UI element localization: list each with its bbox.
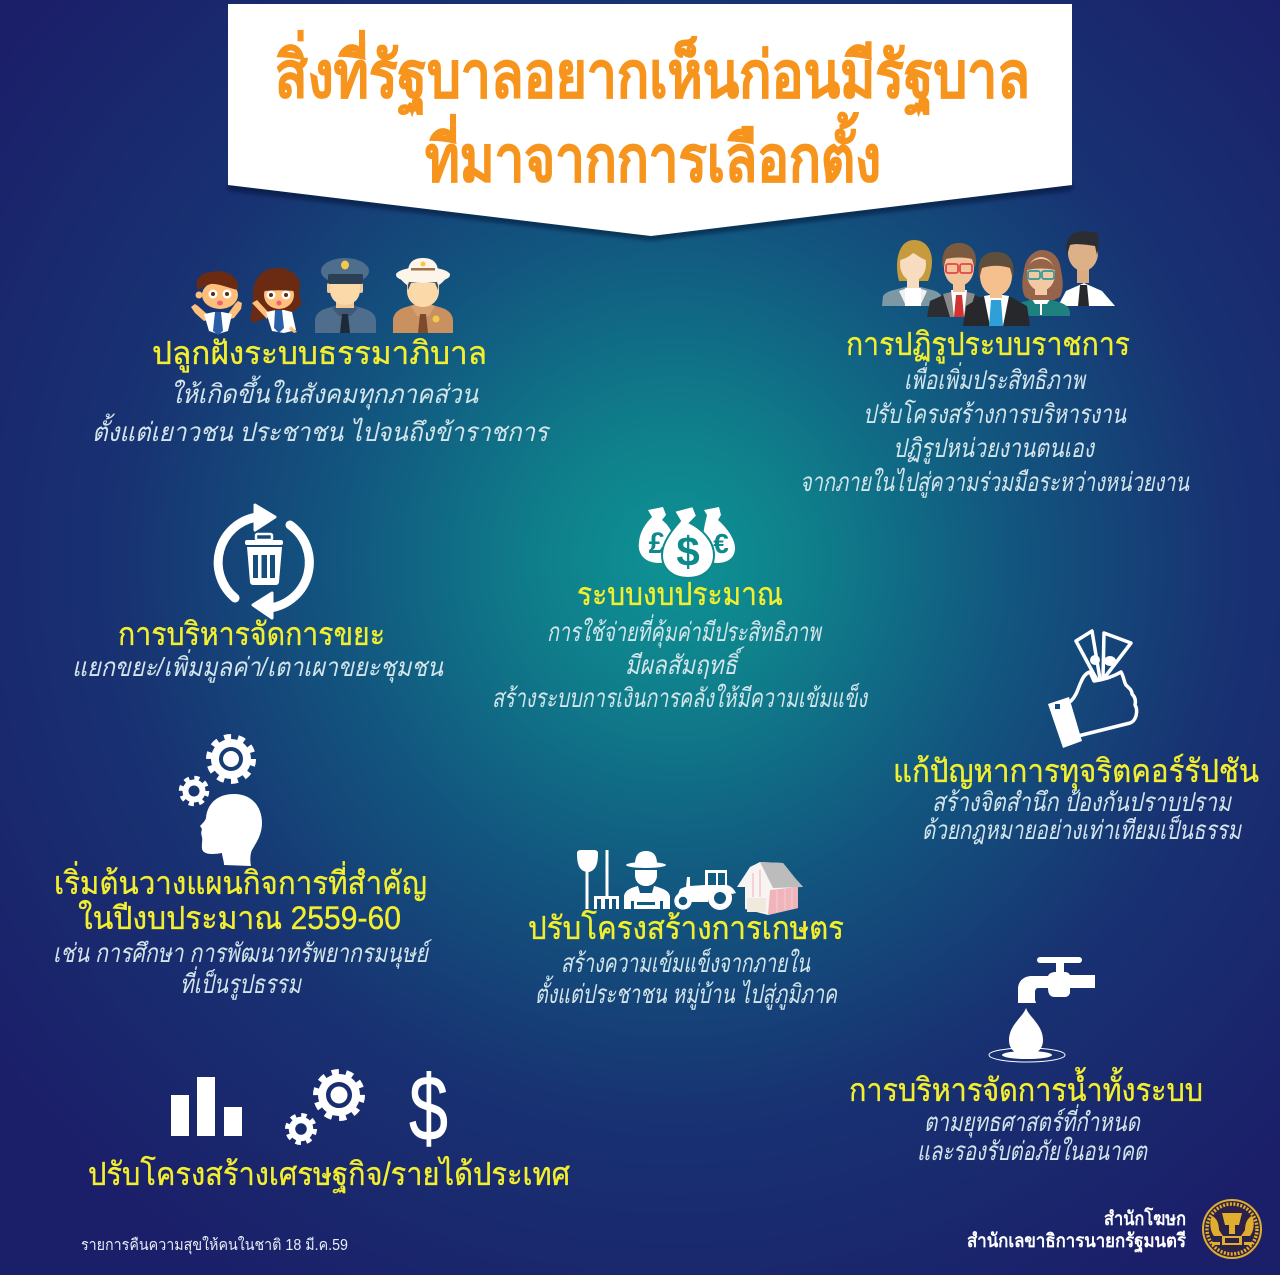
text — [922, 787, 1242, 845]
text: แยกขยะ/เพิ่มมูลค่า/เตาเผาขยะชุมชน — [72, 649, 444, 683]
icon: recycling bin — [218, 505, 309, 618]
text: ปรับโครงสร้างการบริหารงาน — [863, 399, 1127, 429]
footnote: รายการคืนความสุขให้คนในชาติ 18 มี.ค.59 — [81, 1236, 348, 1255]
icon: dollar sign: $ — [409, 1056, 448, 1160]
icon: government seal — [1202, 1199, 1262, 1259]
text: ปฏิรูปหน่วยงานตนเอง — [893, 433, 1096, 464]
text: สร้างความเข้มแข็งจากภายใน — [561, 947, 811, 978]
title line 1: สิ่งที่รัฐบาลอยากเห็นก่อนมีรัฐบาล — [275, 30, 1030, 116]
heading — [54, 861, 427, 936]
panel: anti-corruption — [893, 631, 1259, 845]
title banner — [228, 4, 1072, 240]
icon: money bags: £ — [649, 527, 666, 560]
text — [800, 362, 1190, 498]
panel: agriculture — [528, 850, 844, 1010]
credit: สำนักโฆษก — [1104, 1207, 1186, 1230]
title line 2: ที่มาจากการเลือกตั้ง — [425, 112, 881, 195]
icon: gears — [288, 1072, 362, 1142]
panel: good governance — [92, 258, 551, 447]
panel: water management — [849, 957, 1203, 1166]
heading: การบริหารจัดการน้ำทั้งระบบ — [849, 1067, 1203, 1108]
text: เช่น การศึกษา การพัฒนาทรัพยากรมนุษย์ — [53, 938, 432, 969]
heading: การปฏิรูประบบราชการ — [846, 326, 1130, 364]
icon: money bags: $ — [676, 528, 700, 575]
credit: สำนักเลขาธิการนายกรัฐมนตรี — [967, 1230, 1187, 1254]
text: การใช้จ่ายที่คุ้มค่ามีประสิทธิภาพ — [547, 614, 822, 648]
text: ตั้งแต่ประชาชน หมู่บ้าน ไปสู่ภูมิภาค — [535, 975, 838, 1010]
text: มีผลสัมฤทธิ์ — [625, 646, 745, 680]
heading: ปรับโครงสร้างการเกษตร — [528, 910, 844, 946]
text — [492, 614, 869, 713]
panel: waste management — [72, 505, 444, 683]
text — [535, 947, 838, 1010]
icon: hand holding cash — [1048, 631, 1137, 748]
icon: money bags — [639, 506, 735, 578]
text — [92, 375, 551, 447]
heading: ปรับโครงสร้างเศรษฐกิจ/รายได้ประเทศ — [88, 1156, 570, 1194]
heading: ในปีงบประมาณ 2559-60 — [78, 900, 401, 936]
text — [53, 938, 432, 1000]
text: ตามยุทธศาสตร์ที่กำหนด — [924, 1104, 1141, 1138]
heading: ระบบงบประมาณ — [577, 576, 783, 612]
text: ให้เกิดขึ้นในสังคมทุกภาคส่วน — [170, 375, 479, 410]
icon: students, police, ranger — [191, 258, 453, 335]
panel: key initiatives — [53, 738, 432, 1000]
panel: budget system — [492, 506, 869, 713]
credit — [967, 1207, 1187, 1254]
panel: civil service reform — [800, 231, 1190, 498]
text: และรองรับต่อภัยในอนาคต — [917, 1136, 1148, 1166]
text: ที่เป็นรูปธรรม — [180, 966, 302, 1000]
icon: bar chart — [171, 1077, 242, 1136]
icon: farming — [577, 850, 803, 915]
text: เพื่อเพิ่มประสิทธิภาพ — [904, 362, 1086, 395]
icon: officials group — [882, 231, 1115, 326]
icon: head with gears — [181, 738, 262, 866]
icon: money bags: € — [713, 528, 729, 559]
heading: เริ่มต้นวางแผนกิจการที่สำคัญ — [54, 861, 427, 901]
heading: แก้ปัญหาการทุจริตคอร์รัปชัน — [893, 753, 1259, 791]
text: สร้างระบบการเงินการคลังให้มีความเข้มแข็ง — [492, 682, 869, 713]
heading: การบริหารจัดการขยะ — [118, 616, 385, 652]
icon: faucet and drop — [989, 957, 1095, 1062]
panel: economic restructuring — [88, 1056, 570, 1194]
heading: ปลูกฝังระบบธรรมาภิบาล — [152, 335, 487, 373]
text: ตั้งแต่เยาวชน ประชาชน ไปจนถึงข้าราชการ — [92, 413, 551, 447]
text — [917, 1104, 1148, 1166]
